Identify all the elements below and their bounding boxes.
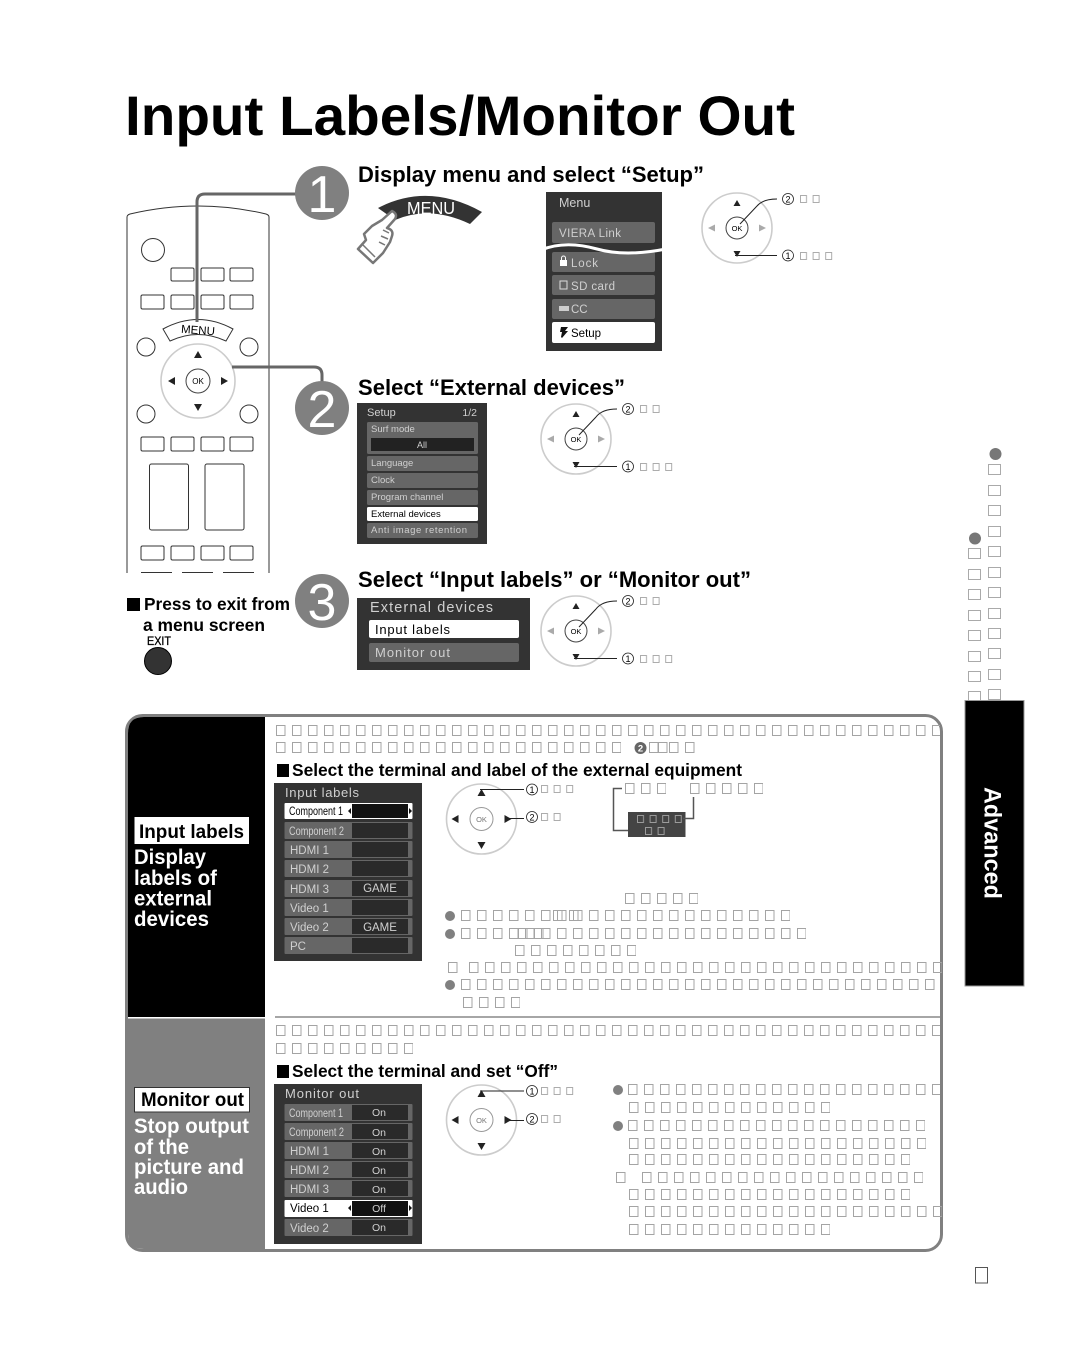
step 3 number bbox=[295, 574, 349, 632]
setup screen: Setup bbox=[367, 407, 396, 419]
step 2 navigation pad: OK bbox=[571, 435, 581, 444]
monitor out callout 1: 1 bbox=[529, 1086, 535, 1096]
external devices screen: Input labels bbox=[375, 622, 450, 637]
remote directional pad: OK bbox=[192, 377, 204, 386]
step 2 number bbox=[295, 381, 349, 439]
panel: monitor out side: picture and bbox=[134, 1156, 244, 1179]
monitor out screen: On bbox=[372, 1107, 386, 1119]
exit note: EXIT bbox=[147, 634, 172, 648]
MENU button with pressing hand bbox=[358, 196, 482, 263]
step 1 callout select: 1 bbox=[785, 251, 791, 261]
menu screen: Lock bbox=[571, 258, 598, 270]
setup screen: External devices bbox=[371, 509, 441, 520]
menu button on remote bbox=[163, 320, 233, 341]
monitor out screen: HDMI 2 bbox=[290, 1165, 329, 1177]
monitor out screen: Video 2 bbox=[290, 1223, 329, 1235]
setup screen: Clock bbox=[371, 475, 395, 486]
external devices screen: External devices bbox=[370, 600, 493, 616]
exit note: a menu screen bbox=[143, 615, 265, 635]
input labels screen: Component 1 bbox=[289, 806, 343, 818]
input labels screen: HDMI 3 bbox=[290, 884, 329, 896]
step 3 callout select bbox=[574, 653, 673, 664]
input labels screen: Video 2 bbox=[290, 922, 329, 934]
setup screen: 1/2 bbox=[462, 407, 477, 419]
monitor out screen bbox=[274, 1084, 422, 1244]
step 1 number: 1 bbox=[308, 166, 336, 224]
menu screen: CC bbox=[571, 304, 588, 316]
monitor out navigation pad bbox=[446, 1085, 516, 1155]
setup screen: All bbox=[417, 440, 427, 450]
monitor out screen: On bbox=[372, 1222, 386, 1234]
sidebar index tofu list bbox=[968, 448, 1002, 702]
monitor out screen: Video 1 bbox=[290, 1203, 329, 1215]
heading step 2: Select “External devices” bbox=[358, 375, 625, 400]
monitor out screen: On bbox=[372, 1184, 386, 1196]
intro tofu text input labels bbox=[276, 725, 940, 754]
remote directional pad bbox=[161, 344, 235, 418]
panel: monitor out side bbox=[128, 1018, 265, 1249]
input labels navigation pad: OK bbox=[476, 815, 487, 824]
step 1 callout OK: 2 bbox=[785, 194, 791, 204]
monitor out screen: Off bbox=[372, 1203, 386, 1215]
panel: monitor out side: audio bbox=[134, 1176, 188, 1199]
step 1 navigation pad bbox=[702, 193, 772, 263]
setup screen: Anti image retention bbox=[371, 525, 467, 536]
menu screen: SD card bbox=[571, 281, 615, 293]
monitor out screen: On bbox=[372, 1165, 386, 1177]
menu screen: Setup bbox=[571, 328, 601, 340]
subheading input labels: Select the terminal and label of the external equipment bbox=[292, 760, 742, 780]
setup screen: Program channel bbox=[371, 492, 443, 503]
input labels navigation pad bbox=[446, 784, 516, 854]
monitor out screen: HDMI 1 bbox=[290, 1146, 329, 1158]
monitor out notes bbox=[613, 1084, 942, 1236]
intro tofu text input labels: 2 bbox=[638, 744, 643, 754]
remote control illustration bbox=[127, 206, 269, 573]
input labels screen: GAME bbox=[363, 922, 397, 934]
monitor out screen: Component 1 bbox=[289, 1108, 343, 1120]
menu button on remote: MENU bbox=[181, 324, 215, 338]
input labels notes bbox=[445, 893, 942, 1009]
step 2 number: 2 bbox=[308, 381, 336, 439]
intro tofu text monitor out bbox=[276, 1025, 940, 1055]
panel: input labels side: Display bbox=[134, 846, 206, 869]
input labels callout 1: 1 bbox=[529, 785, 535, 795]
step 3 navigation pad: OK bbox=[571, 627, 581, 636]
input labels screen: Component 2 bbox=[289, 826, 344, 838]
input labels callout 2 bbox=[509, 812, 561, 822]
input labels screen: Video 1 bbox=[290, 903, 329, 915]
external devices screen bbox=[357, 598, 530, 670]
input labels screen: GAME bbox=[363, 883, 397, 895]
monitor out navigation pad: OK bbox=[476, 1116, 487, 1125]
step 3 callout OK: 2 bbox=[625, 596, 631, 606]
exit note: Press to exit from bbox=[144, 594, 290, 614]
label example diagram bbox=[614, 783, 763, 837]
heading step 3: Select “Input labels” or “Monitor out” bbox=[358, 567, 751, 592]
panel: input labels side bbox=[128, 717, 265, 1017]
monitor out screen: Monitor out bbox=[285, 1086, 359, 1101]
heading step 1: Display menu and select “Setup” bbox=[358, 162, 704, 187]
connector from step 1 to menu button bbox=[197, 194, 298, 322]
panel: input labels side: devices bbox=[134, 908, 209, 931]
main rounded panel bbox=[126, 716, 942, 1250]
step 2 callout select: 1 bbox=[625, 462, 631, 472]
panel: monitor out side: of the bbox=[134, 1136, 189, 1159]
step 2 callout select bbox=[574, 461, 673, 472]
MENU button with pressing hand: MENU bbox=[407, 198, 455, 218]
Advanced tab bbox=[965, 700, 1024, 986]
panel: input labels side: Input labels bbox=[139, 822, 244, 843]
step 1 navigation pad: OK bbox=[732, 224, 742, 233]
Advanced tab: Advanced bbox=[978, 787, 1006, 899]
subheading monitor out: Select the terminal and set “Off” bbox=[292, 1061, 558, 1081]
input labels screen: HDMI 2 bbox=[290, 864, 329, 876]
step 2 callout OK bbox=[579, 404, 660, 435]
monitor out callout 2: 2 bbox=[529, 1114, 535, 1124]
input labels screen: PC bbox=[290, 941, 306, 953]
monitor out screen: HDMI 3 bbox=[290, 1184, 329, 1196]
connector from step 2 to directional pad bbox=[232, 367, 322, 384]
monitor out callout 2 bbox=[509, 1114, 561, 1124]
panel: input labels side: labels of bbox=[134, 867, 218, 890]
step 3 callout OK bbox=[579, 596, 660, 627]
step 1 callout select bbox=[735, 250, 833, 261]
setup screen bbox=[357, 403, 487, 544]
title: Input Labels/Monitor Out bbox=[125, 84, 795, 147]
panel: monitor out side: Stop output bbox=[134, 1115, 249, 1138]
exit note bbox=[127, 594, 290, 674]
menu screen: VIERA Link bbox=[559, 228, 621, 240]
step 3 number: 3 bbox=[308, 574, 336, 632]
step 2 navigation pad bbox=[541, 404, 611, 474]
monitor out screen: On bbox=[372, 1146, 386, 1158]
step 1 number bbox=[295, 166, 349, 224]
monitor out callout 1 bbox=[480, 1086, 574, 1096]
input labels callout 2: 2 bbox=[529, 812, 535, 822]
menu screen bbox=[541, 192, 666, 351]
panel: input labels side: external bbox=[134, 888, 212, 910]
monitor out screen: Component 2 bbox=[289, 1127, 344, 1139]
step 1 callout OK bbox=[740, 194, 820, 224]
panel: monitor out side: Monitor out bbox=[141, 1090, 245, 1111]
monitor out screen: On bbox=[372, 1127, 386, 1139]
step 3 navigation pad bbox=[541, 596, 611, 666]
setup screen: Language bbox=[371, 458, 413, 469]
input labels screen: HDMI 1 bbox=[290, 845, 329, 857]
menu screen: Menu bbox=[559, 196, 590, 210]
input labels screen bbox=[274, 783, 422, 961]
page number tofu bbox=[976, 1268, 988, 1283]
step 2 callout OK: 2 bbox=[625, 404, 631, 414]
external devices screen: Monitor out bbox=[375, 645, 450, 660]
input labels screen: Input labels bbox=[285, 785, 360, 800]
setup screen: Surf mode bbox=[371, 424, 415, 435]
input labels callout 1 bbox=[480, 784, 574, 795]
step 3 callout select: 1 bbox=[625, 654, 631, 664]
